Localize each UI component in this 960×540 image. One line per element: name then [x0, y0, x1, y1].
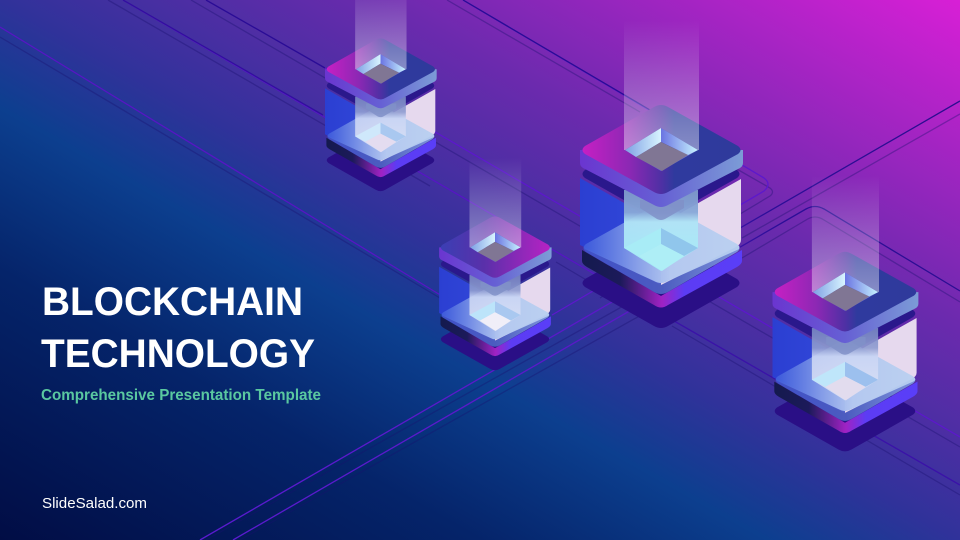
title: TECHNOLOGY: [41, 332, 315, 376]
cube: top centre-left: [325, 0, 437, 191]
subtitle: Comprehensive Presentation Template: [41, 387, 321, 404]
line: lower left to top right: [200, 101, 960, 540]
title: [41, 280, 315, 376]
line: upper left: [0, 27, 442, 296]
line: looped branch: [670, 292, 960, 485]
lower glow: [469, 275, 521, 331]
line: second diagonal with corner: [233, 206, 960, 540]
cube: large centre-right: [580, 20, 743, 328]
cube: centre: [439, 158, 552, 370]
lower glow: [355, 97, 406, 152]
lower glow: [624, 190, 698, 271]
cube: right: [773, 176, 918, 451]
title: BLOCKCHAIN: [42, 280, 303, 324]
website: SlideSalad.com: [42, 495, 147, 512]
line: third diagonal with corner: [463, 0, 768, 315]
lower glow: [812, 328, 878, 400]
